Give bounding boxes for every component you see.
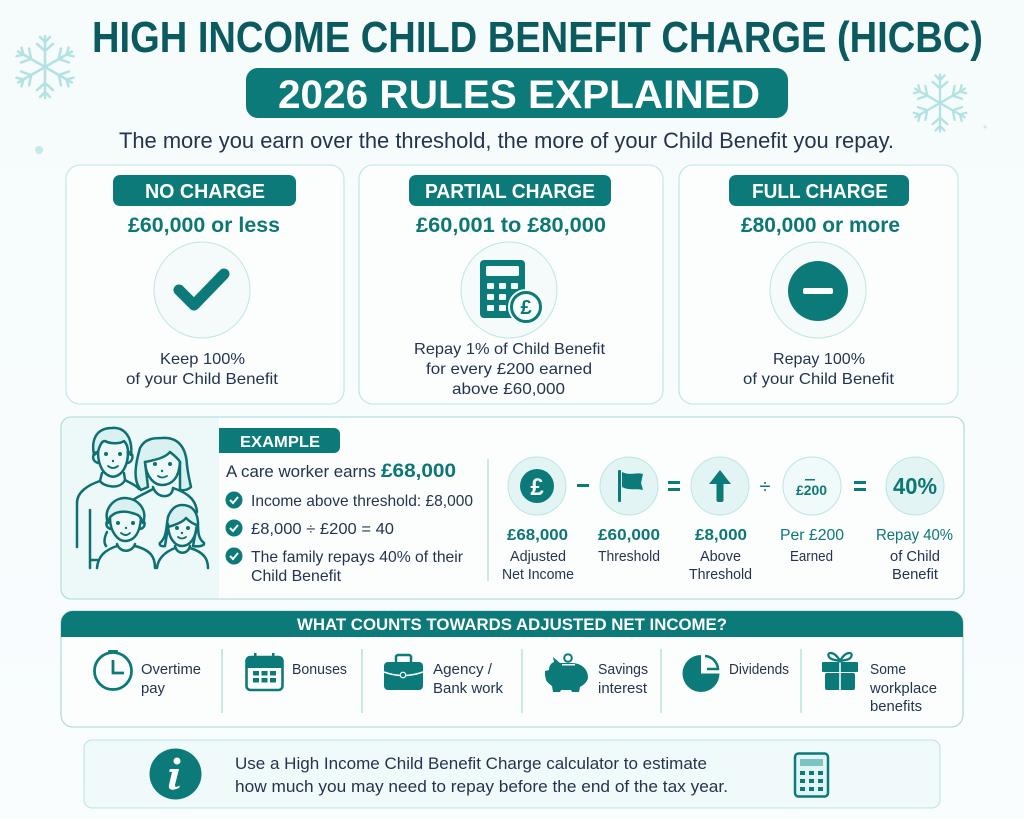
example step 3: Child Benefit: [251, 568, 342, 585]
formula: adjusted net income: £: [530, 474, 544, 501]
formula: per 200: [780, 457, 844, 565]
formula: per 200: £200: [796, 482, 827, 498]
subtitle banner: 2026 RULES EXPLAINED: [278, 73, 760, 117]
description: [743, 351, 895, 388]
heading: partial charge: PARTIAL CHARGE: [425, 181, 595, 203]
panel: what counts towards adjusted net income: [61, 611, 963, 727]
operator: minus: [577, 484, 589, 487]
formula: repay 40 percent: Benefit: [892, 567, 938, 583]
formula: threshold: [598, 457, 660, 565]
description: of your Child Benefit: [743, 371, 895, 388]
item: some workplace benefits: workplace: [869, 681, 937, 697]
example step 2: £8,000 ÷ £200 = 40: [251, 521, 394, 538]
formula: adjusted net income: [502, 457, 574, 583]
example step 3: [226, 548, 464, 585]
tip text: how much you may need to repay before the end of the tax year.: [235, 778, 728, 796]
description: Repay 1% of Child Benefit: [414, 341, 606, 358]
income range: £80,000 or more: [741, 214, 900, 237]
item: overtime pay: [94, 650, 201, 697]
heading: example: EXAMPLE: [240, 434, 320, 451]
icon: check mark: [154, 242, 250, 338]
panel: partial charge: [359, 165, 663, 404]
icon: family: [77, 428, 208, 568]
description: above £60,000: [452, 381, 565, 398]
formula: repay 40 percent: of Child: [890, 549, 940, 565]
item: overtime pay: Overtime: [141, 662, 201, 678]
item: dividends: [682, 655, 789, 692]
icon: snowflake right: [912, 74, 968, 132]
item: bonuses: Bonuses: [292, 662, 347, 678]
description: [414, 341, 606, 398]
heading: example: [219, 428, 340, 453]
description: Repay 100%: [773, 351, 865, 368]
heading: what counts: [61, 611, 963, 637]
formula: adjusted net income: Adjusted: [510, 549, 566, 565]
formula: repay 40 percent: 40%: [893, 473, 937, 499]
formula: adjusted net income: £68,000: [507, 527, 568, 544]
item: some workplace benefits: Some: [870, 662, 906, 678]
income range: £60,001 to £80,000: [416, 214, 606, 237]
formula: above threshold: [689, 457, 752, 583]
item: bonuses: [246, 653, 347, 690]
example statement: [226, 461, 456, 482]
example statement: A care worker earns: [226, 462, 376, 481]
item: agency / bank work: [384, 655, 504, 697]
formula: threshold: Threshold: [598, 549, 660, 565]
panel: no charge: [66, 165, 344, 404]
heading: no charge: NO CHARGE: [145, 181, 265, 203]
item: some workplace benefits: benefits: [870, 699, 922, 715]
formula: adjusted net income: Net Income: [502, 567, 574, 583]
icon: minus sign: [770, 242, 866, 338]
example step 1: Income above threshold: £8,000: [251, 493, 473, 510]
heading: what counts: WHAT COUNTS TOWARDS ADJUSTED NET INCOME?: [297, 615, 727, 634]
formula: repay 40 percent: [876, 457, 953, 583]
description: of your Child Benefit: [126, 371, 279, 388]
description: for every £200 earned: [426, 361, 592, 378]
icon: snowflake left: [14, 36, 76, 98]
heading: full charge: [729, 175, 909, 206]
item: agency / bank work: Agency /: [433, 662, 493, 678]
panel: calculator tip: [84, 740, 940, 808]
formula: above threshold: Above: [700, 549, 741, 565]
formula: repay 40 percent: Repay 40%: [876, 527, 953, 544]
tip text: Use a High Income Child Benefit Charge calculator to estimate: [235, 755, 707, 773]
icon: information: [150, 748, 202, 800]
operator: equals: [668, 481, 680, 491]
icon: calculator with pound: [461, 242, 557, 338]
description: [126, 351, 279, 388]
item: overtime pay: pay: [141, 681, 166, 697]
heading: full charge: FULL CHARGE: [752, 181, 888, 203]
income range: £60,000 or less: [128, 214, 280, 237]
item: agency / bank work: Bank work: [433, 681, 504, 697]
tip text: [235, 755, 728, 796]
example statement: £68,000: [381, 461, 456, 482]
formula: per 200: Per £200: [780, 527, 844, 544]
intro text: The more you earn over the threshold, the more of your Child Benefit you repay.: [119, 128, 894, 153]
item: savings interest: [545, 654, 648, 697]
item: some workplace benefits: [822, 653, 937, 715]
operator: equals: [854, 481, 866, 491]
heading: no charge: [113, 175, 296, 206]
formula: above threshold: £8,000: [695, 527, 747, 544]
panel: full charge: [679, 165, 958, 404]
description: Keep 100%: [160, 351, 245, 368]
formula: above threshold: Threshold: [689, 567, 752, 583]
item: dividends: Dividends: [729, 662, 789, 678]
formula: threshold: £60,000: [598, 527, 660, 544]
item: savings interest: Savings: [598, 662, 648, 678]
formula: per 200: Earned: [790, 549, 833, 565]
operator: divide: ÷: [760, 476, 771, 498]
heading: partial charge: [409, 175, 611, 206]
panel: example: [61, 417, 964, 599]
icon: calculator: [795, 754, 828, 796]
icon: calculator with pound: £: [520, 297, 532, 319]
example step 3: The family repays 40% of their: [251, 549, 464, 566]
item: savings interest: interest: [598, 681, 647, 697]
